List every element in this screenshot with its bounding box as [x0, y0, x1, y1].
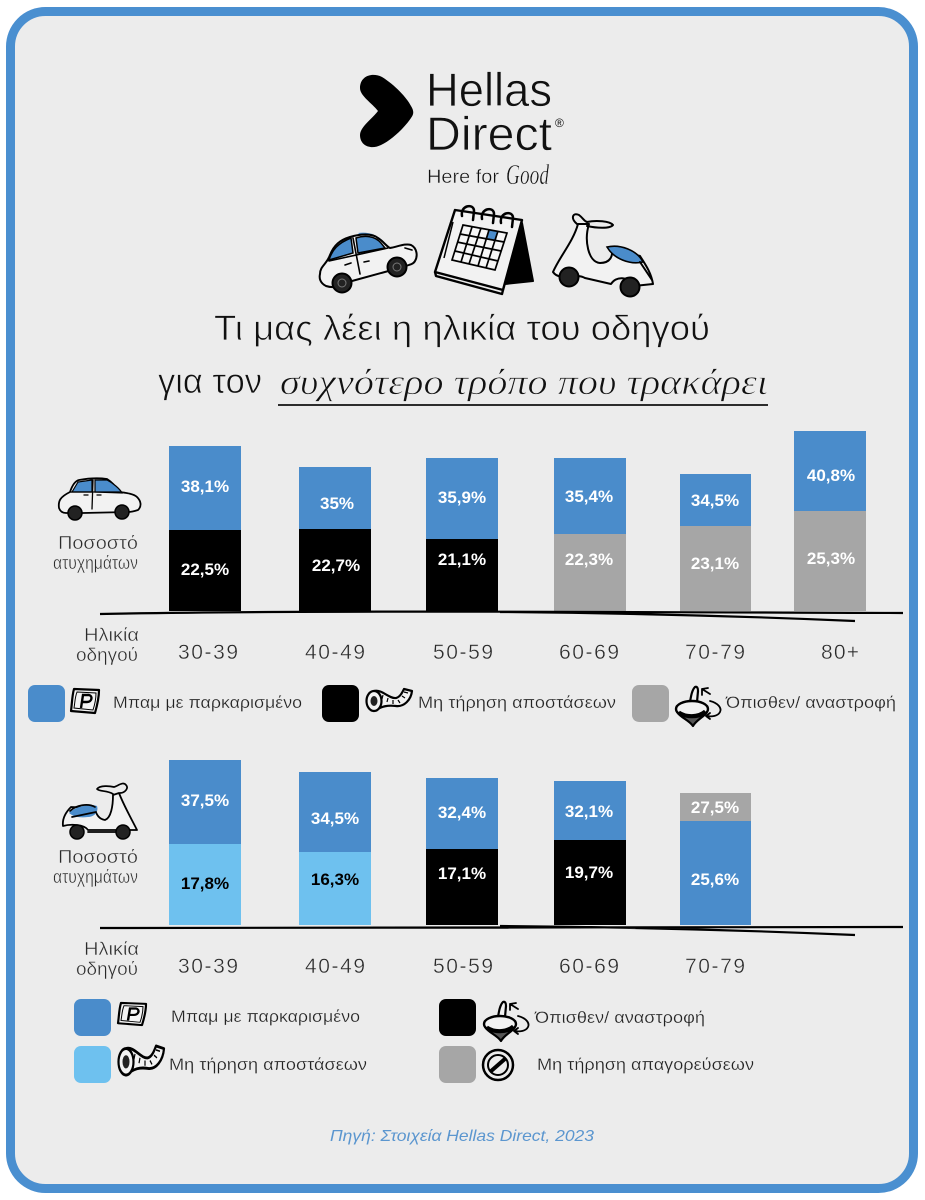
legend item: reverse: [439, 999, 705, 1041]
bar 80+: [794, 431, 866, 611]
logo: Hellas Direct: [360, 63, 564, 191]
bar 50-59: 35,9%: [438, 488, 486, 507]
logo tagline: [427, 159, 549, 191]
age labels: 40-49: [305, 641, 365, 664]
legend item: parked: Μπαμ με παρκαρισμένο: [113, 693, 302, 712]
title: συχνότερο τρόπο που τρακάρει: [280, 362, 768, 402]
y label: ατυχημάτων: [53, 553, 138, 573]
age labels: 80+: [821, 641, 859, 664]
bar 60-69: 35,4%: [565, 487, 613, 506]
bar 50-59: 32,4%: [438, 803, 486, 822]
x label: [76, 625, 139, 665]
bar 50-59: 21,1%: [438, 550, 486, 569]
logo chevron: [360, 75, 413, 147]
bar 30-39: [169, 760, 241, 925]
age labels: 70-79: [685, 955, 745, 978]
bar 60-69: 19,7%: [565, 863, 613, 882]
age labels: [178, 641, 859, 664]
y label: Ποσοστό: [58, 533, 138, 553]
age labels: 30-39: [178, 955, 238, 978]
chart: cars: [53, 431, 903, 665]
bar 70-79: 27,5%: [691, 798, 739, 817]
bar 40-49: 35%: [320, 494, 354, 513]
age labels: 40-49: [305, 955, 365, 978]
y label: [53, 533, 138, 573]
bar 30-39: 38,1%: [181, 477, 229, 496]
bar 70-79: [680, 474, 751, 611]
x label: [76, 939, 139, 979]
legend item: reverse: [632, 685, 896, 726]
bar 70-79: 34,5%: [691, 491, 739, 510]
bar 40-49: 34,5%: [311, 809, 359, 828]
legend item: parked: Μπαμ με παρκαρισμένο: [171, 1007, 360, 1026]
legend item: distance: Μη τήρηση αποστάσεων: [418, 693, 616, 712]
logo tagline: Good: [506, 159, 549, 191]
bar 70-79: [680, 793, 751, 925]
x label: οδηγού: [76, 645, 138, 665]
chart: scooters: [53, 760, 903, 979]
title: Τι μας λέει η ηλικία του οδηγού: [214, 309, 710, 348]
title: για τον: [158, 362, 262, 401]
age labels: 50-59: [433, 955, 493, 978]
legend item: parked: [28, 685, 302, 722]
axis: [100, 612, 903, 621]
x label: Ηλικία: [84, 625, 139, 645]
icon: car: [320, 233, 417, 292]
y label: ατυχημάτων: [53, 867, 138, 887]
bar 60-69: [554, 458, 626, 611]
legend: cars: [28, 685, 896, 726]
bar 30-39: 17,8%: [181, 874, 229, 893]
bar 40-49: [299, 467, 371, 611]
logo wordmark: ®: [555, 116, 564, 130]
y label: [53, 847, 138, 887]
legend item: distance: [74, 1046, 367, 1083]
legend: scooters: [74, 999, 754, 1083]
bar 60-69: 32,1%: [565, 802, 613, 821]
age labels: 30-39: [178, 641, 238, 664]
icon: small scooter: [63, 783, 137, 839]
bar 40-49: 22,7%: [312, 556, 360, 575]
logo tagline: Here for: [427, 167, 500, 188]
bar 30-39: [169, 446, 241, 611]
bar 60-69: 22,3%: [565, 550, 613, 569]
bar 40-49: 16,3%: [311, 870, 359, 889]
legend item: reverse: Όπισθεν/ αναστροφή: [725, 693, 896, 712]
icon: calendar: [435, 206, 533, 294]
y label: Ποσοστό: [58, 847, 138, 867]
title: [158, 309, 768, 405]
bar 30-39: 37,5%: [181, 791, 229, 810]
logo wordmark: Hellas: [426, 63, 552, 116]
bar 50-59: [426, 778, 498, 925]
bar 30-39: 22,5%: [181, 560, 229, 579]
icon: scooter: [553, 214, 653, 296]
age labels: 70-79: [685, 641, 745, 664]
source: Πηγή: Στοιχεία Hellas Direct, 2023: [330, 1128, 594, 1145]
age labels: [178, 955, 745, 978]
bar 50-59: [426, 458, 498, 611]
age labels: 60-69: [559, 641, 619, 664]
age labels: 60-69: [559, 955, 619, 978]
legend item: distance: [322, 685, 616, 722]
icon: small car: [59, 478, 141, 520]
x label: οδηγού: [76, 959, 138, 979]
bar 50-59: 17,1%: [438, 864, 486, 883]
legend item: prohibition: [439, 1046, 754, 1083]
age labels: 50-59: [433, 641, 493, 664]
bar 70-79: 25,6%: [691, 870, 739, 889]
legend item: parked: [74, 999, 360, 1036]
bar 70-79: 23,1%: [691, 554, 739, 573]
logo wordmark: [426, 63, 564, 160]
legend item: distance: Μη τήρηση αποστάσεων: [169, 1055, 367, 1074]
x label: Ηλικία: [84, 939, 139, 959]
bar 80+: 40,8%: [807, 466, 855, 485]
bar 80+: 25,3%: [807, 549, 855, 568]
bar 40-49: [299, 772, 371, 925]
logo wordmark: Direct: [426, 107, 552, 160]
legend item: prohibition: Μη τήρηση απαγορεύσεων: [537, 1055, 754, 1074]
axis: [100, 926, 903, 935]
bar 60-69: [554, 781, 626, 925]
legend item: reverse: Όπισθεν/ αναστροφή: [534, 1008, 705, 1027]
